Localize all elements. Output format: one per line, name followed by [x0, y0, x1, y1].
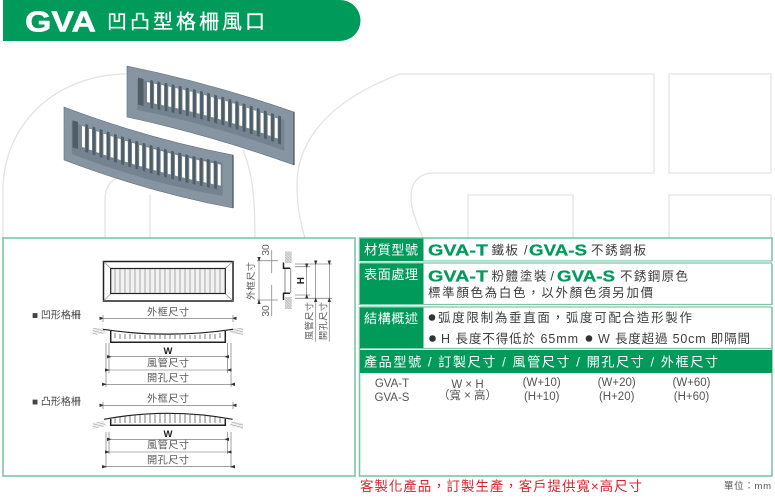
row: surface treatment: 標準顏色為白色，以外顏色須另加價: [428, 285, 653, 300]
drawing: side section: [245, 244, 332, 342]
row: material: GVA-S: [529, 242, 587, 260]
drawing: front view: [104, 262, 233, 301]
drawing: side section: 30: [261, 244, 272, 256]
row: material: GVA-T: [428, 242, 488, 260]
drawing: concave section: 風管尺寸: [147, 356, 189, 370]
row: structure: W 長度超過 50cm 即隔間: [598, 331, 750, 346]
bullet: [586, 335, 592, 342]
row: surface treatment: 粉體塗裝: [492, 268, 547, 284]
drawing: convex section: W: [164, 429, 173, 440]
row: surface treatment: [360, 263, 772, 304]
table values: (H+10): [524, 391, 560, 403]
background outline pattern: [3, 74, 771, 238]
row: surface treatment: 不銹鋼原色: [620, 268, 688, 284]
title banner: [3, 0, 360, 41]
row: surface treatment: GVA-T: [428, 268, 488, 286]
table values: (W+60): [672, 377, 711, 389]
label: concave grille: ■ 凹形格柵: [32, 308, 81, 322]
table values: GVA-S: [375, 392, 410, 404]
drawing: convex section: 風管尺寸: [147, 438, 189, 452]
panel: specifications: [359, 238, 773, 476]
drawing: side section: 外框尺寸: [245, 262, 256, 300]
drawing: concave section: W: [164, 346, 173, 357]
product image: lower grille: [64, 107, 233, 208]
drawing: side section: 30: [261, 305, 272, 317]
row: material: [360, 238, 772, 261]
table values: (H+60): [674, 391, 709, 403]
drawing: convex section: [93, 392, 243, 468]
row: material: 鐵板 /: [492, 242, 528, 258]
row: surface treatment: /: [550, 270, 554, 284]
title text: 凹凸型格柵風口: [107, 10, 265, 34]
drawing: side section: 風管尺寸: [303, 302, 314, 340]
title code: GVA: [25, 6, 96, 38]
drawing: concave section: 外框尺寸: [147, 306, 189, 318]
row: structure: 結構概述: [364, 311, 418, 326]
bullet: [429, 335, 436, 342]
drawing: concave section: 開孔尺寸: [147, 372, 189, 384]
row: material: 材質型號: [364, 242, 418, 258]
product image: upper grille: [127, 66, 294, 165]
panel: dimension drawings: [3, 238, 355, 476]
table values: W × H: [451, 379, 484, 391]
row: material: 不銹鋼板: [591, 242, 646, 258]
table header: [360, 350, 772, 373]
row: structure: 弧度限制為垂直面，弧度可配合造形製作: [438, 310, 692, 325]
row: surface treatment: GVA-S: [557, 268, 615, 286]
table values: (W+10): [523, 377, 561, 389]
table values: [375, 377, 711, 404]
drawing: convex section: 外框尺寸: [147, 392, 189, 405]
row: structure: H 長度不得低於 65mm: [441, 331, 578, 346]
label: convex grille: ■ 凸形格柵: [32, 395, 81, 408]
row: structure: [360, 307, 772, 348]
table values: （寬 × 高）: [438, 388, 497, 402]
table values: (W+20): [598, 377, 636, 389]
drawing: side section: 開孔尺寸: [317, 302, 328, 340]
table values: GVA-T: [375, 378, 409, 390]
drawing: convex section: 開孔尺寸: [147, 454, 189, 466]
drawing: side section: H: [296, 277, 307, 284]
row: surface treatment: 表面處理: [364, 267, 418, 282]
footnote: custom order: 客製化產品，訂製生產，客戶提供寬×高尺寸: [360, 478, 642, 494]
drawing: concave section: [93, 306, 243, 387]
unit note: 單位：mm: [724, 480, 771, 492]
table header: 產品型號 / 訂製尺寸 / 風管尺寸 / 開孔尺寸 / 外框尺寸: [364, 354, 718, 370]
bullet: [429, 314, 435, 321]
table values: (H+20): [599, 391, 635, 403]
